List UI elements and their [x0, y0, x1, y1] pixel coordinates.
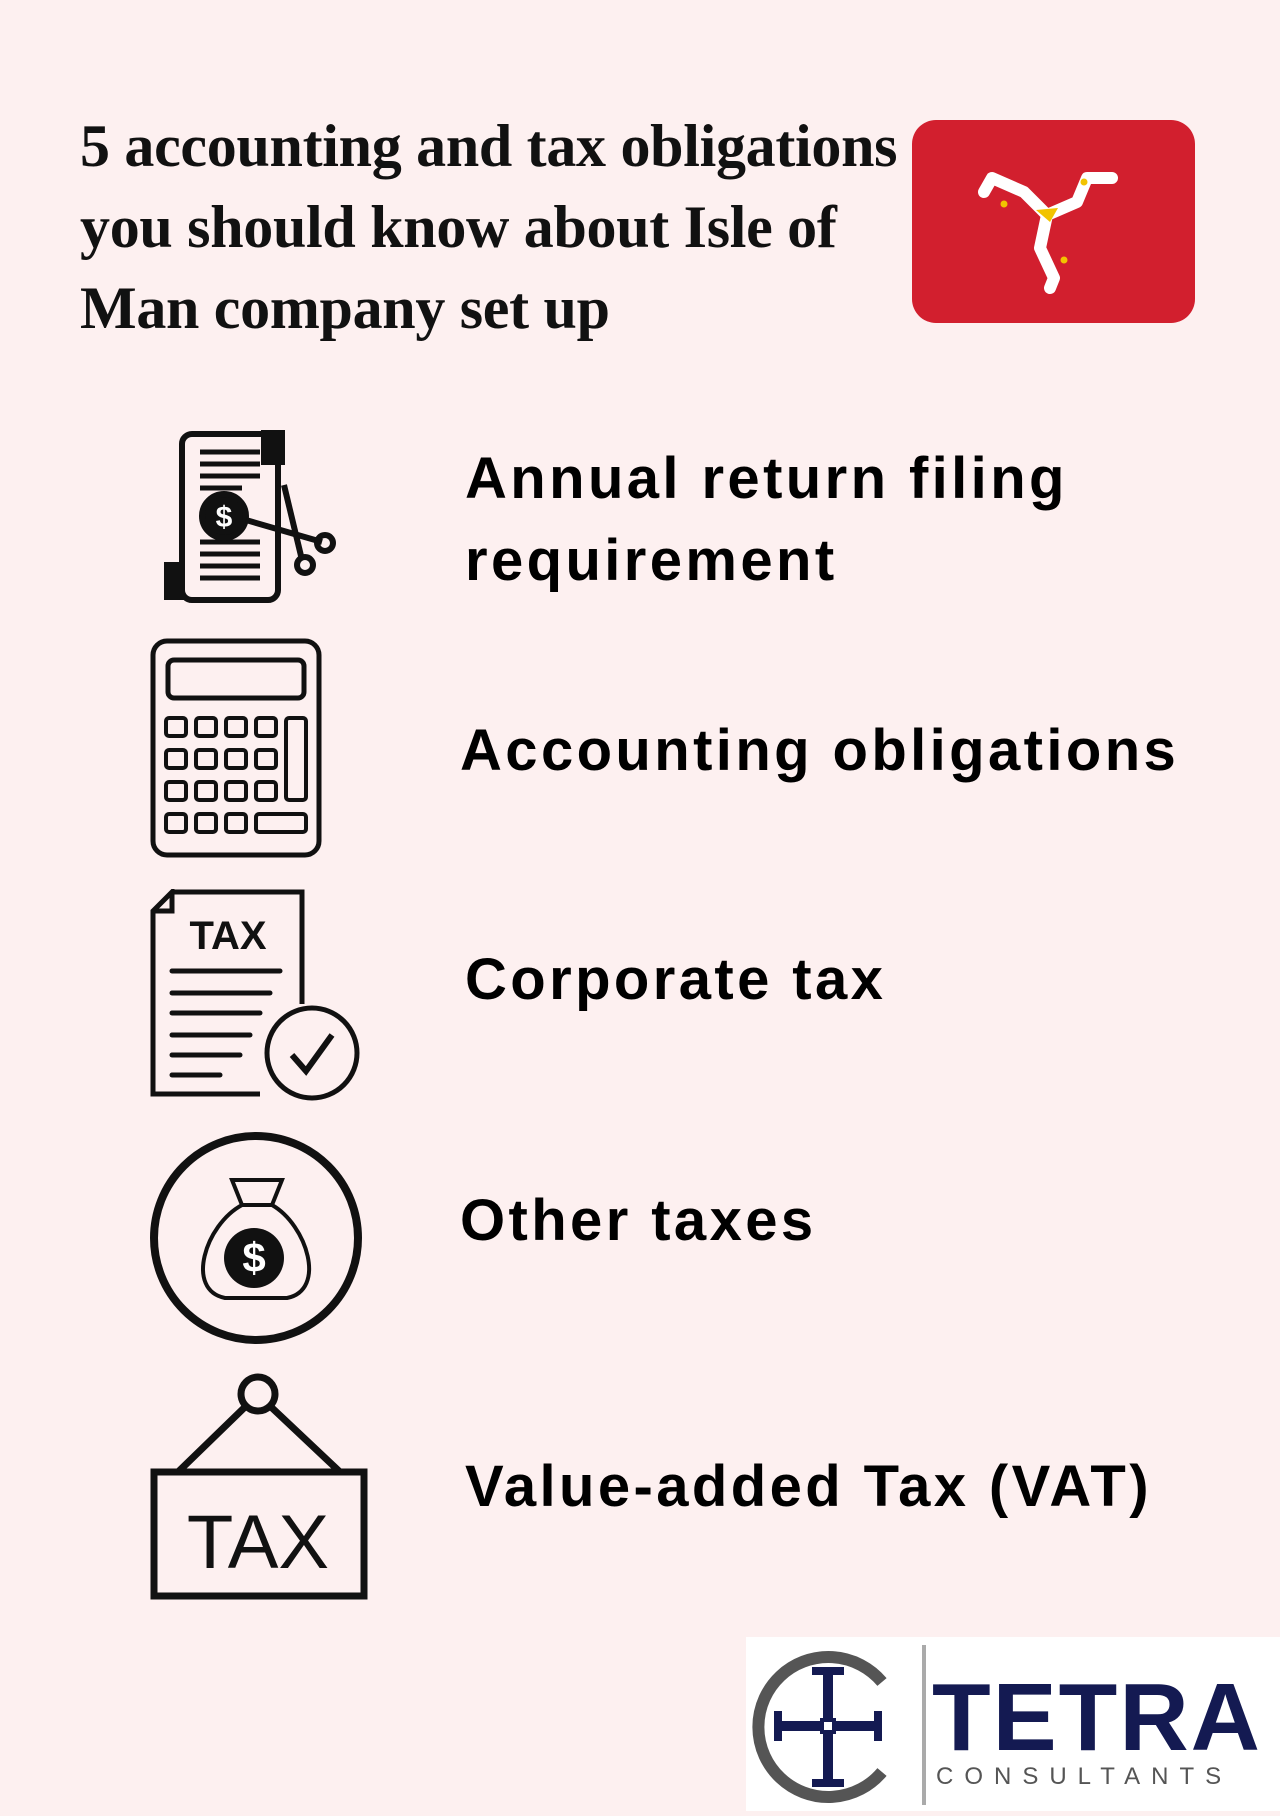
icon: money bag in circle [150, 1132, 362, 1344]
title [80, 113, 897, 341]
text: VAT: Value-added Tax (VAT) [465, 1454, 1152, 1519]
icon: receipt with scissors: $ [216, 501, 233, 534]
icon: Isle of Man flag [912, 120, 1195, 323]
logo: Tetra Consultants: CONSULTANTS [936, 1763, 1232, 1790]
icon: calculator [150, 638, 322, 858]
text: other taxes: Other taxes [460, 1188, 817, 1253]
icon: money bag in circle: $ [242, 1234, 266, 1281]
logo: Tetra Consultants [746, 1637, 1280, 1811]
icon: tax document with check [150, 889, 360, 1100]
title: Man company set up [80, 275, 610, 341]
icon: tax sign [150, 1374, 368, 1600]
title: 5 accounting and tax obligations [80, 113, 897, 179]
icon: tax document with check: TAX [189, 914, 267, 958]
icon: receipt with scissors [164, 430, 336, 603]
logo: Tetra Consultants: TETRA [932, 1664, 1262, 1771]
text: annual return: requirement [465, 528, 838, 593]
icon: tax sign: TAX [187, 1500, 329, 1585]
text: accounting obligations: Accounting obligations [460, 718, 1179, 783]
title: you should know about Isle of [80, 194, 837, 260]
text: annual return: Annual return filing [465, 446, 1068, 511]
text: annual return [465, 446, 1068, 593]
text: corporate tax: Corporate tax [465, 947, 886, 1012]
